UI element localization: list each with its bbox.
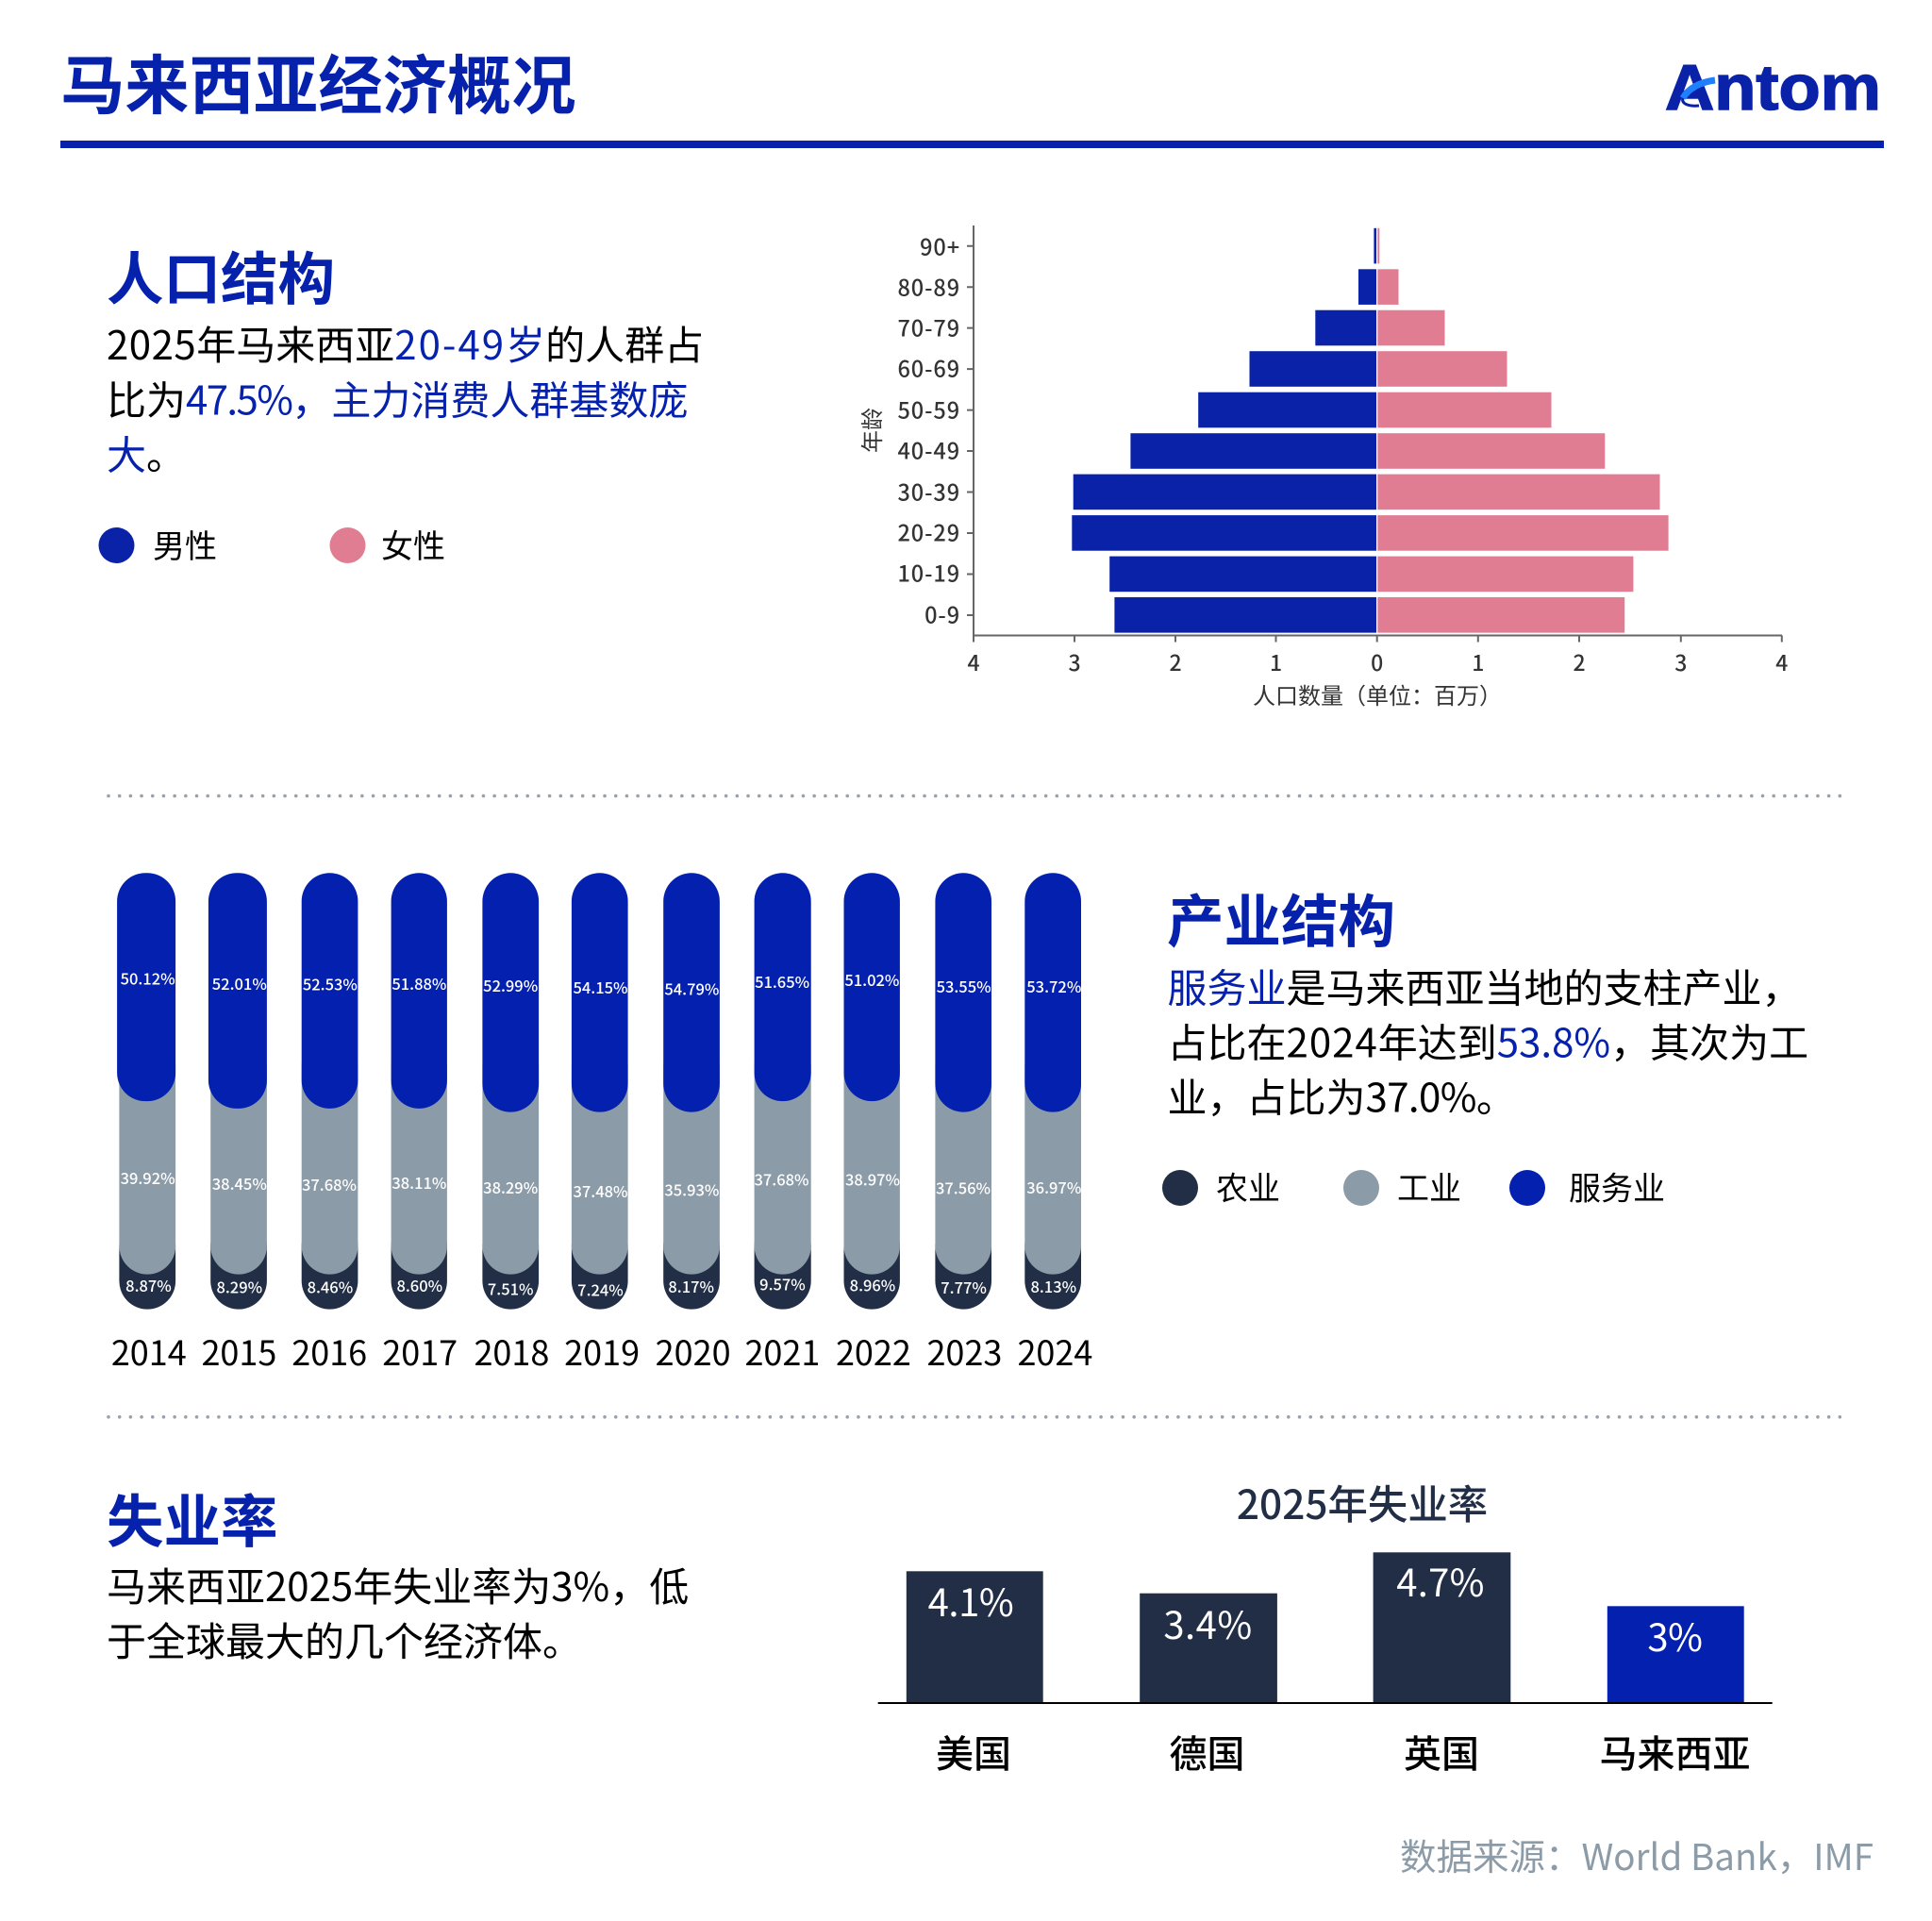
- services values: 50.12%: [121, 967, 175, 990]
- agriculture values: 8.60%: [396, 1274, 442, 1296]
- services values: [121, 967, 1081, 1000]
- bar: USA: 4.1%: [928, 1573, 1013, 1628]
- agriculture values: 8.17%: [668, 1275, 714, 1297]
- bar: Germany: 3.4%: [1163, 1595, 1253, 1650]
- industry values: 38.45%: [212, 1172, 267, 1194]
- header rule: [60, 141, 1884, 148]
- y axis labels: 50-59: [898, 393, 960, 425]
- services values: 51.88%: [391, 972, 446, 994]
- year labels: 2015: [201, 1327, 276, 1376]
- category labels: [936, 1724, 1751, 1779]
- chart: stacked capsule bars: [111, 873, 1092, 1376]
- industry values: 36.97%: [1026, 1176, 1081, 1198]
- y axis title: 年龄: [854, 408, 887, 453]
- panel: population: [98, 226, 1788, 710]
- year labels: 2014: [111, 1327, 187, 1376]
- bar: UK: [1374, 1552, 1510, 1702]
- panel: industry: [111, 873, 1808, 1376]
- chart title: 2025年失业率: [1237, 1474, 1488, 1531]
- legend: gender: [98, 521, 445, 567]
- baseline axis: [878, 1702, 1773, 1704]
- legend: gender: 女性: [381, 521, 445, 567]
- text block: population: 比为47.5%，主力消费人群基数庞: [107, 370, 688, 427]
- text block: unemployment: 马来西亚2025年失业率为3%，低: [107, 1556, 689, 1613]
- y axis labels: 40-49: [898, 434, 960, 466]
- legend: gender: 男性: [153, 521, 217, 567]
- text block: unemployment: [107, 1556, 689, 1668]
- agriculture values: 8.87%: [125, 1274, 172, 1296]
- industry values: 37.68%: [302, 1173, 357, 1195]
- category labels: 美国: [936, 1724, 1011, 1779]
- industry values: 37.48%: [573, 1179, 628, 1202]
- year labels: 2018: [474, 1327, 549, 1376]
- heading: unemployment: 失业率: [107, 1477, 277, 1559]
- divider: [108, 794, 1841, 797]
- category labels: 马来西亚: [1600, 1724, 1751, 1779]
- y axis labels: 0-9: [924, 598, 960, 630]
- year labels: 2024: [1017, 1327, 1092, 1376]
- year labels: 2017: [382, 1327, 458, 1376]
- year labels: 2022: [836, 1327, 911, 1376]
- industry segments: [119, 1038, 1081, 1275]
- x axis labels: 0: [1371, 645, 1383, 677]
- services values: 52.99%: [483, 974, 538, 996]
- services values: 52.53%: [303, 972, 358, 994]
- text block: industry: 占比在2024年达到53.8%，其次为工: [1168, 1012, 1808, 1070]
- agriculture values: 9.57%: [759, 1272, 806, 1295]
- agriculture values: 8.46%: [308, 1275, 353, 1297]
- text block: industry: 服务业是马来西亚当地的支柱产业，: [1168, 957, 1802, 1015]
- chart: unemployment bars: [878, 1474, 1773, 1779]
- panel: unemployment: [107, 1474, 1773, 1779]
- y axis labels: 90+: [920, 230, 960, 262]
- industry values: 37.68%: [754, 1168, 809, 1191]
- industry values: 37.56%: [936, 1177, 991, 1199]
- category labels: 德国: [1170, 1724, 1245, 1779]
- year labels: 2019: [564, 1327, 640, 1376]
- legend: sectors: 服务业: [1569, 1162, 1665, 1210]
- divider: [108, 1415, 1841, 1419]
- male bars: [1072, 228, 1376, 633]
- axes: [967, 226, 1782, 642]
- agriculture values: [125, 1272, 1076, 1301]
- legend: sectors: 工业: [1397, 1162, 1461, 1210]
- legend: sectors: [1162, 1162, 1665, 1210]
- services values: 53.72%: [1026, 975, 1081, 997]
- agriculture values: 7.77%: [941, 1276, 987, 1298]
- bar: Malaysia: 3%: [1647, 1608, 1703, 1662]
- text block: population: [107, 314, 704, 481]
- y axis labels: 70-79: [898, 311, 960, 343]
- agriculture segments: [119, 1217, 1081, 1310]
- services values: 51.02%: [844, 968, 899, 991]
- services values: 54.15%: [573, 976, 628, 998]
- chart: population pyramid: [854, 226, 1788, 710]
- x axis labels: 1: [1270, 645, 1282, 677]
- services values: 53.55%: [937, 975, 991, 997]
- logo: Antom: Antom: [1665, 52, 1881, 124]
- bar: UK: 4.7%: [1396, 1553, 1485, 1608]
- text block: industry: 业，占比为37.0%。: [1168, 1066, 1516, 1125]
- industry values: 38.97%: [845, 1168, 900, 1191]
- year labels: 2021: [744, 1327, 820, 1376]
- year labels: 2023: [926, 1327, 1002, 1376]
- heading: industry: 产业结构: [1167, 877, 1395, 959]
- y axis labels: [898, 230, 960, 630]
- agriculture values: 8.29%: [216, 1275, 262, 1297]
- text block: unemployment: 于全球最大的几个经济体。: [107, 1611, 582, 1668]
- x axis labels: 2: [1169, 645, 1182, 677]
- title: 马来西亚经济概况: [60, 34, 575, 127]
- y axis labels: 60-69: [898, 351, 960, 383]
- x axis labels: 4: [967, 645, 980, 677]
- x axis title: 人口数量（单位：百万）: [1253, 677, 1502, 710]
- y axis labels: 10-19: [898, 557, 960, 589]
- year labels: 2020: [656, 1327, 731, 1376]
- year labels: 2016: [291, 1327, 367, 1376]
- x axis labels: 1: [1472, 645, 1484, 677]
- y axis labels: 30-39: [898, 476, 960, 508]
- heading: population: 人口结构: [107, 234, 335, 316]
- y axis labels: 80-89: [898, 270, 960, 302]
- industry values: 35.93%: [664, 1178, 719, 1200]
- services values: 51.65%: [755, 970, 809, 993]
- industry values: 38.11%: [391, 1171, 446, 1194]
- year labels: [111, 1327, 1092, 1376]
- x axis labels: [967, 645, 1788, 677]
- x axis labels: 3: [1068, 645, 1081, 677]
- services segments: [117, 873, 1081, 1112]
- category labels: 英国: [1404, 1724, 1479, 1779]
- text block: population: 2025年马来西亚20-49岁的人群占: [107, 314, 704, 372]
- industry values: 39.92%: [121, 1166, 175, 1189]
- source note: 数据来源：World Bank，IMF: [1400, 1829, 1874, 1881]
- bar: Germany: [1140, 1594, 1277, 1702]
- services values: 52.01%: [212, 972, 267, 994]
- industry values: [121, 1166, 1081, 1202]
- x axis labels: 4: [1775, 645, 1788, 677]
- agriculture values: 8.13%: [1030, 1275, 1076, 1297]
- bar: Malaysia: [1607, 1606, 1744, 1702]
- x axis labels: 3: [1674, 645, 1687, 677]
- female bars: [1377, 228, 1669, 633]
- text block: population: 大。: [107, 425, 186, 481]
- agriculture values: 7.24%: [577, 1278, 624, 1301]
- industry values: 38.29%: [483, 1176, 538, 1198]
- bar: USA: [907, 1571, 1043, 1702]
- agriculture values: 8.96%: [850, 1274, 895, 1296]
- services values: 54.79%: [664, 977, 719, 1000]
- x axis labels: 2: [1573, 645, 1586, 677]
- legend: sectors: 农业: [1216, 1162, 1280, 1210]
- agriculture values: 7.51%: [488, 1278, 534, 1300]
- y axis labels: 20-29: [898, 515, 960, 547]
- text block: industry: [1168, 957, 1808, 1125]
